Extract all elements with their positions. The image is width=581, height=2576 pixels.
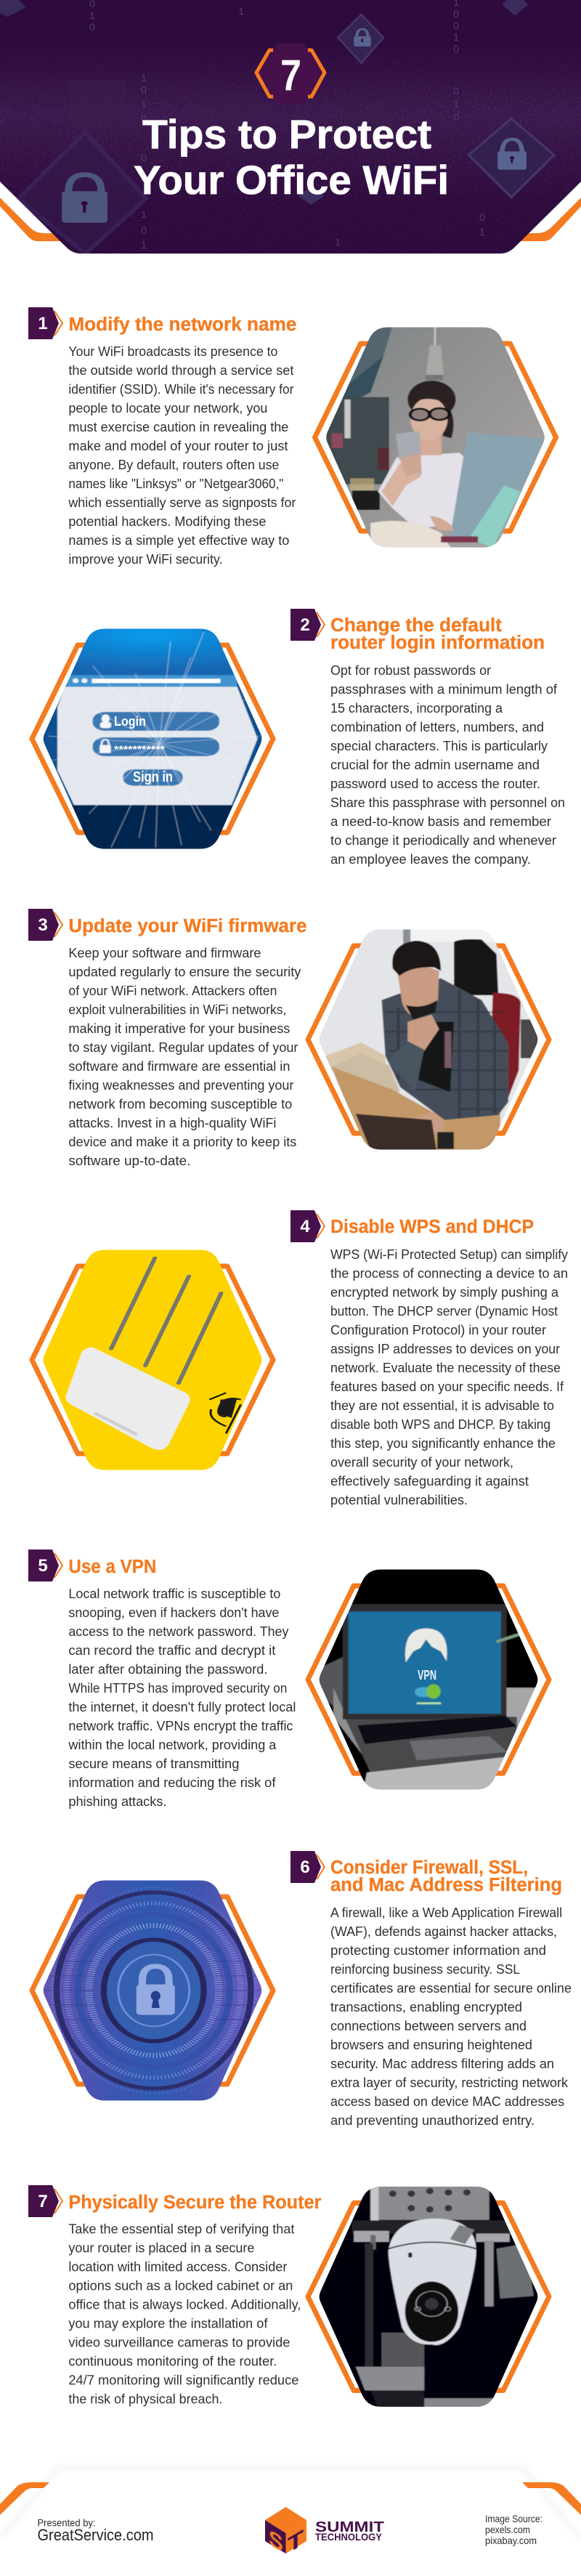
icon: padlock right (497, 139, 527, 170)
panel: tip 2 (32, 609, 565, 867)
body text (330, 1905, 572, 2128)
body text: software up-to-date. (68, 1154, 190, 1168)
heading (330, 1858, 562, 1895)
body text: exploit vulnerabilities in WiFi networks, (68, 1003, 286, 1017)
VPN label: VPN (418, 1668, 436, 1682)
badge 6 (290, 1851, 325, 1883)
binary digits: 1 (141, 208, 147, 220)
binary digits: 0 (453, 8, 459, 20)
binary digits: 0 (141, 84, 147, 95)
body text: (WAF), defends against hacker attacks, (330, 1924, 557, 1939)
body text (68, 1587, 296, 1809)
badge 3: 3 (38, 915, 48, 935)
body text: special characters. This is particularly (330, 739, 548, 753)
body text: While HTTPS has improved security on (68, 1681, 287, 1696)
body text (68, 2221, 301, 2406)
body text: device and make it a priority to keep its (68, 1135, 296, 1149)
body text: extra layer of security, restricting network (330, 2075, 569, 2090)
badge 5 (28, 1550, 62, 1581)
panel: tip 4 (32, 1210, 568, 1507)
orange corner right (514, 198, 581, 241)
binary digits: 0 (89, 21, 95, 33)
binary digits (89, 0, 485, 251)
body text: A firewall, like a Web Application Firewall (330, 1905, 562, 1920)
heading: Physically Secure the Router (68, 2192, 321, 2213)
body text: office that is always locked. Additionally, (68, 2297, 301, 2312)
body text: overall security of your network, (330, 1455, 513, 1470)
presented by (38, 2516, 154, 2544)
heading: Modify the network name (68, 315, 296, 335)
body text: names is a simple yet effective way to (68, 533, 289, 548)
title: Tips to Protect (142, 111, 431, 157)
body text: must exercise caution in revealing the (68, 420, 288, 434)
body text: button. The DHCP server (Dynamic Host (330, 1304, 558, 1319)
body text: snooping, even if hackers don't have (68, 1605, 279, 1620)
panel: tip 3 (28, 909, 549, 1168)
body text: options such as a locked cabinet or an (68, 2278, 293, 2293)
orange corner right (522, 2482, 581, 2515)
orange corner left (0, 198, 67, 241)
body text: to change it periodically and whenever (330, 833, 556, 848)
logo: Summit Technology: SUMMIT (315, 2519, 384, 2535)
logo: Summit Technology: S (269, 2524, 283, 2557)
photo: security camera (320, 2187, 537, 2407)
binary digits: 0 (141, 113, 147, 124)
panel: tip 7 (28, 2183, 549, 2414)
badge 4: 4 (300, 1217, 310, 1236)
body text: 24/7 monitoring will significantly reduce (68, 2373, 298, 2387)
body text: can record the traffic and decrypt it (68, 1643, 275, 1658)
photo: white router on yellow (37, 1244, 267, 1475)
body text: you may explore the installation of (68, 2316, 268, 2330)
badge 2 (290, 609, 325, 641)
body text: improve your WiFi security. (68, 552, 222, 567)
body text: to stay vigilant. Regular updates of your (68, 1040, 298, 1055)
body text: people to locate your network, you (68, 401, 267, 416)
logo: Summit Technology (265, 2507, 384, 2558)
body text: assigns IP addresses to devices on your (330, 1342, 560, 1356)
footer panel edge (0, 2468, 581, 2539)
body text: access based on device MAC addresses (330, 2094, 564, 2109)
body text: phishing attacks. (68, 1794, 166, 1809)
body text: Keep your software and firmware (68, 946, 261, 960)
body text: the process of connecting a device to an (330, 1266, 568, 1281)
body text: combination of letters, numbers, and (330, 720, 544, 734)
binary digits: 1 (89, 9, 95, 21)
body text: your router is placed in a secure (68, 2240, 254, 2255)
heading: Update your WiFi firmware (68, 916, 306, 936)
body text: effectively safeguarding it against (330, 1474, 529, 1489)
number badge 7 (256, 44, 325, 102)
binary digits: 0 (453, 43, 459, 54)
binary digits: 0 (453, 85, 459, 97)
login labels: Login (114, 714, 146, 729)
badge 1 (28, 307, 62, 339)
body text: Your WiFi broadcasts its presence to (68, 344, 277, 359)
body text: the risk of physical breach. (68, 2391, 222, 2406)
photo: man at laptop (320, 930, 537, 1149)
body text: fixing weaknesses and preventing your (68, 1078, 293, 1093)
body text: network from becoming susceptible to (68, 1097, 292, 1111)
hexagon frame (308, 2203, 549, 2390)
photo: laptop with VPN screen (320, 1569, 537, 1790)
binary digits: 0 (141, 224, 147, 236)
body text: reinforcing business security. SSL (330, 1962, 520, 1977)
badge 5: 5 (38, 1556, 48, 1576)
heading: Consider Firewall, SSL, (330, 1858, 528, 1878)
body text: certificates are essential for secure online (330, 1981, 572, 1996)
photo: woman with phone and laptop (319, 325, 556, 550)
body text: continuous monitoring of the router. (68, 2354, 277, 2368)
image source: pexels.com (485, 2524, 530, 2535)
body text: identifier (SSID). While it's necessary for (68, 382, 293, 397)
hexagon frame (32, 645, 273, 833)
body text: Take the essential step of verifying that (68, 2221, 294, 2236)
body text: passphrases with a minimum length of (330, 682, 558, 697)
logo: Summit Technology: T (288, 2524, 304, 2558)
title (134, 111, 449, 203)
binary digits: 1 (453, 98, 459, 110)
image source: Image Source: (485, 2513, 543, 2524)
body text: software and firmware are essential in (68, 1059, 290, 1074)
footer (0, 2468, 581, 2558)
body text: Opt for robust passwords or (330, 663, 491, 678)
body text: anyone. By default, routers often use (68, 458, 279, 472)
body text: browsers and ensuring heightened (330, 2038, 532, 2052)
image source: pixabay.com (485, 2535, 537, 2546)
body text: of your WiFi network. Attackers often (68, 984, 277, 998)
binary digits: 0 (479, 211, 485, 223)
badge 2: 2 (300, 615, 310, 635)
body text: features based on your specific needs. If (330, 1380, 564, 1394)
body text: and preventing unauthorized entry. (330, 2113, 535, 2128)
heading: and Mac Address Filtering (330, 1875, 562, 1895)
body text: security. Mac address filtering adds an (330, 2057, 554, 2071)
binary digits: 0 (453, 20, 459, 31)
login labels (114, 714, 173, 785)
binary digits: 1 (141, 72, 147, 84)
body text: potential hackers. Modifying these (68, 514, 266, 529)
body text: video surveillance cameras to provide (68, 2335, 290, 2349)
body text (330, 663, 565, 867)
body text: WPS (Wi-Fi Protected Setup) can simplify (330, 1247, 568, 1262)
illustration: digital padlock (37, 1876, 267, 2105)
body text: location with limited access. Consider (68, 2259, 287, 2274)
body text: make and model of your router to just (68, 439, 288, 453)
binary digits: 0 (141, 152, 147, 163)
logo: Summit Technology: TECHNOLOGY (315, 2531, 383, 2543)
body text: within the local network, providing a (68, 1738, 277, 1752)
binary digits: 1 (238, 5, 244, 17)
badge 6: 6 (300, 1858, 310, 1877)
body text: which essentially serve as signposts for (68, 495, 296, 510)
orange corner left (0, 2482, 49, 2515)
body text: an employee leaves the company. (330, 852, 531, 867)
hexagon frame (32, 1897, 273, 2084)
panel: tip 5 (28, 1550, 549, 1809)
body text: later after obtaining the password. (68, 1662, 267, 1677)
binary digits: 1 (141, 239, 147, 251)
badge 7: 7 (38, 2192, 48, 2211)
body text: crucial for the admin username and (330, 758, 540, 772)
binary digits: 1 (141, 98, 147, 110)
hexagon frame (308, 1586, 549, 1773)
heading (330, 615, 545, 653)
body text: protecting customer information and (330, 1943, 546, 1958)
image source (485, 2513, 543, 2546)
login labels: Sign in (133, 769, 173, 785)
body text: Configuration Protocol) in your router (330, 1323, 546, 1337)
banner background (0, 0, 581, 254)
presented by: GreatService.com (38, 2526, 154, 2544)
panel: tip 1 (28, 307, 556, 567)
body text: Share this passphrase with personnel on (330, 795, 565, 810)
body text: network traffic. VPNs encrypt the traffic (68, 1719, 293, 1733)
body text (68, 344, 296, 567)
body text: information and reducing the risk of (68, 1775, 276, 1790)
hexagon frame (32, 1266, 273, 1454)
body text: this step, you significantly enhance the (330, 1436, 556, 1451)
body text: access to the network password. They (68, 1624, 288, 1639)
badge 7 (28, 2185, 62, 2217)
binary digits: 0 (453, 111, 459, 123)
body text (68, 946, 301, 1168)
heading: Change the default (330, 615, 503, 636)
badge 1: 1 (38, 314, 48, 333)
body text: disable both WPS and DHCP. By taking (330, 1417, 550, 1432)
binary digits: 1 (453, 31, 459, 43)
photo: login screen (37, 625, 267, 852)
presented by: Presented by: (38, 2516, 96, 2528)
body text: transactions, enabling encrypted (330, 2000, 522, 2014)
body text: Local network traffic is susceptible to (68, 1587, 280, 1601)
body text: potential vulnerabilities. (330, 1493, 468, 1507)
body text: password used to access the router. (330, 777, 540, 791)
hexagon frame (315, 344, 556, 531)
body text: a need-to-know basis and remember (330, 814, 551, 829)
title: Your Office WiFi (134, 157, 449, 203)
icon: padlock left (62, 175, 107, 223)
body text: updated regularly to ensure the security (68, 965, 301, 979)
heading: Disable WPS and DHCP (330, 1217, 534, 1237)
body text: the internet, it doesn't fully protect local (68, 1700, 296, 1714)
number badge 7: 7 (280, 51, 301, 100)
heading: router login information (330, 633, 545, 653)
body text: network. Evaluate the necessity of these (330, 1361, 561, 1375)
body text (330, 1247, 568, 1507)
body text: attacks. Invest in a high-quality WiFi (68, 1116, 276, 1130)
hexagon frame (308, 946, 549, 1133)
body text: they are not essential, it is advisable to (330, 1398, 554, 1413)
body text: names like "Linksys" or "Netgear3060," (68, 477, 283, 491)
body text: secure means of transmitting (68, 1757, 239, 1771)
body text: connections between servers and (330, 2019, 527, 2033)
body text: the outside world through a service set (68, 363, 293, 378)
binary digits: 1 (335, 236, 341, 248)
login labels: *********** (114, 743, 166, 755)
badge 3 (28, 909, 62, 941)
body text: making it imperative for your business (68, 1021, 290, 1036)
header banner (0, 0, 581, 254)
heading: Use a VPN (68, 1557, 156, 1577)
badge 4 (290, 1210, 325, 1242)
icon: padlock top (354, 29, 371, 46)
binary digits: 1 (479, 226, 485, 238)
body text: encrypted network by simply pushing a (330, 1285, 559, 1300)
panel: tip 6 (32, 1851, 572, 2128)
body text: 15 characters, incorporating a (330, 701, 503, 716)
